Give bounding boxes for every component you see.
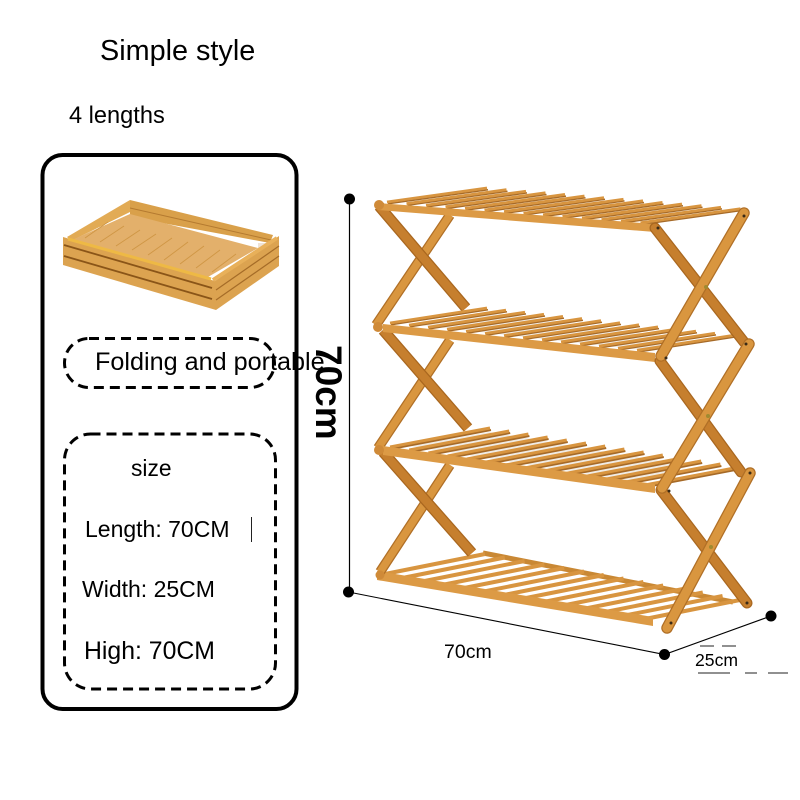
size heading: size	[131, 455, 172, 481]
dimension: width line	[343, 586, 776, 660]
folding label text: Folding and portable	[95, 348, 325, 376]
bolts	[656, 214, 752, 624]
size box	[64, 434, 276, 689]
right legs	[655, 213, 750, 628]
shelf 3	[383, 428, 741, 493]
title: Simple style	[100, 35, 255, 67]
left joints	[373, 200, 384, 580]
panel frame	[42, 155, 296, 709]
height: High: 70CM	[84, 638, 215, 665]
shelf 4 bottom	[377, 554, 742, 626]
width: Width: 25CM	[82, 576, 215, 602]
folding label pill	[64, 338, 274, 388]
stray marks	[698, 646, 788, 673]
panel: folded product and size	[42, 155, 325, 709]
size box outline	[64, 434, 276, 689]
shelf 1	[378, 188, 742, 232]
length: Length: 70CM	[85, 516, 229, 542]
width label: 70cm	[444, 641, 492, 663]
left legs	[376, 206, 472, 572]
back rail of bottom shelf	[483, 553, 733, 602]
illustration: bamboo shelf	[373, 188, 752, 628]
dimension: height line	[308, 194, 355, 592]
shelf 2	[383, 308, 735, 362]
height label: 70cm	[308, 345, 349, 440]
stray tick	[251, 517, 252, 542]
subtitle: 4 lengths: 4 lengths	[69, 103, 165, 129]
depth label: 25cm	[695, 650, 738, 670]
icon: folded bamboo shelf	[63, 200, 279, 310]
